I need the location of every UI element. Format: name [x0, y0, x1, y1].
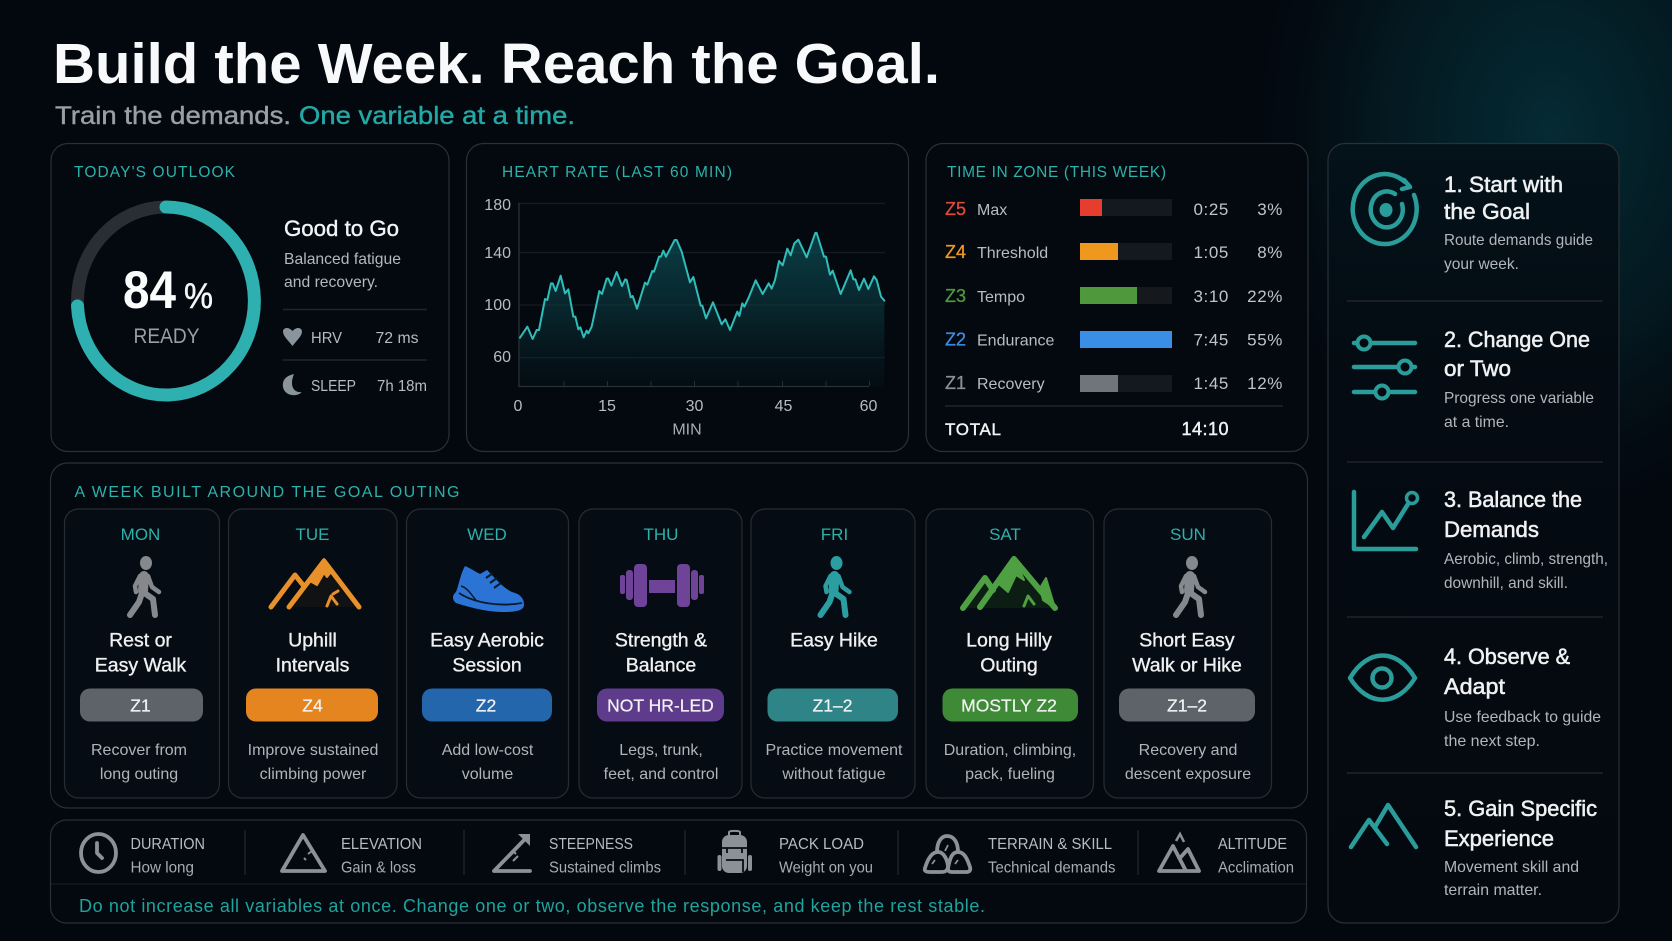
- icon: dumbbell: [620, 564, 704, 607]
- day card: Saturday: MOSTLY Z2: [961, 696, 1057, 716]
- line chart: heart rate: 15: [598, 398, 616, 415]
- readiness ring: %: [184, 277, 213, 316]
- metric: sleep: SLEEP: [311, 378, 356, 395]
- icon: altitude peaks: [1159, 834, 1199, 871]
- line chart: heart rate: 180: [484, 197, 511, 214]
- icon: orange mountain: [271, 559, 359, 607]
- icon: steep slope: [494, 834, 530, 871]
- day card: Monday: Rest or: [109, 630, 172, 652]
- zone row: Z5: Max: [977, 202, 1007, 219]
- principle 1: Route demands guide: [1444, 232, 1593, 249]
- day card: Sunday: [1104, 509, 1272, 798]
- day card: Tuesday: climbing power: [260, 766, 367, 783]
- status text: Good to Go: [284, 216, 399, 241]
- principle 5: 5. Gain Specific: [1444, 796, 1597, 821]
- day card: Tuesday: TUE: [296, 525, 330, 544]
- day card: Saturday: SAT: [989, 525, 1021, 544]
- variable: elevation: [282, 835, 422, 876]
- zone row: Z4: 1:05: [1194, 243, 1229, 262]
- day card: Sunday: Recovery and: [1139, 742, 1237, 759]
- day card: Tuesday: Uphill: [288, 630, 337, 652]
- zone row: Z3: [945, 286, 1283, 306]
- panel: today's outlook: [51, 144, 449, 452]
- day card: Thursday: Legs, trunk,: [619, 742, 703, 759]
- day card: Friday: Easy Hike: [790, 630, 878, 652]
- day card: Wednesday: [406, 509, 568, 798]
- variable: duration: DURATION: [130, 836, 205, 853]
- line chart: heart rate: 45: [775, 398, 792, 415]
- variable: elevation: ELEVATION: [341, 836, 422, 853]
- line chart: heart rate: 30: [686, 398, 704, 415]
- zone row: Z5: 0:25: [1194, 200, 1229, 219]
- zone row: Z5: [945, 199, 1283, 219]
- day card: Thursday: Balance: [626, 654, 696, 676]
- principle 3: [1354, 487, 1608, 592]
- zone row: Z4: Z4: [945, 242, 966, 262]
- day card: Friday: Practice movement: [766, 742, 903, 759]
- variable: steepness: [494, 834, 661, 876]
- zone row: Z2: Z2: [945, 330, 966, 350]
- day card: Thursday: NOT HR-LED: [607, 696, 714, 716]
- subtitle: Train the demands.: [55, 102, 291, 130]
- icon: shoe: [453, 566, 524, 612]
- day card: Saturday: pack, fueling: [965, 766, 1055, 783]
- zone row: Z1: 1:45: [1194, 374, 1229, 393]
- zone total: 14:10: [1181, 419, 1229, 439]
- zone row: Z1: [945, 373, 1283, 393]
- zone row: Z3: Tempo: [977, 289, 1025, 306]
- day card: Sunday: SUN: [1170, 525, 1206, 544]
- icon: walker: [130, 556, 159, 615]
- variable: steepness: Sustained climbs: [549, 860, 661, 876]
- day card: Monday: long outing: [100, 766, 178, 783]
- day card: Wednesday: WED: [467, 525, 507, 544]
- principle 1: your week.: [1444, 256, 1519, 273]
- metric: sleep: 7h 18m: [377, 378, 427, 395]
- icon: backpack: [718, 831, 752, 873]
- variable: duration: [81, 834, 205, 876]
- panel: week plan: [50, 463, 1308, 808]
- icon: green mountain: [963, 557, 1055, 608]
- day card: Wednesday: Easy Aerobic: [430, 630, 544, 652]
- zone row: Z3: Z3: [945, 286, 966, 306]
- icon: elevation peak: [282, 835, 325, 871]
- metric: HRV: HRV: [311, 330, 342, 347]
- principle 2: Progress one variable: [1444, 390, 1594, 407]
- principle 2: at a time.: [1444, 414, 1509, 431]
- day card: Tuesday: Z4: [302, 696, 323, 716]
- line chart: heart rate: 100: [484, 297, 511, 314]
- variable: elevation: Gain & loss: [341, 860, 416, 876]
- principle 4: Adapt: [1444, 674, 1506, 699]
- day card: Friday: [751, 509, 915, 798]
- icon: target: [1353, 174, 1417, 244]
- line chart: heart rate: 0: [514, 398, 523, 415]
- zone row: Z1: 12%: [1247, 374, 1283, 393]
- line chart: heart rate: MIN: [672, 422, 702, 438]
- day card: Monday: Z1: [130, 696, 151, 716]
- zone row: Z5: 3%: [1257, 200, 1283, 219]
- callout: guidance note: Do not increase all variables at once. Change one or two, observe the response, and keep the rest stable.: [79, 896, 985, 916]
- principle 1: [1353, 172, 1593, 273]
- variable: pack load: PACK LOAD: [779, 836, 864, 853]
- zone row: Z4: Threshold: [977, 245, 1048, 262]
- principle 5: Experience: [1444, 826, 1554, 851]
- subtitle: One variable at a time.: [299, 102, 575, 130]
- icon: hiker: [820, 556, 850, 615]
- icon: eye: [1350, 656, 1415, 700]
- day card: Wednesday: Session: [452, 654, 522, 676]
- variable: terrain and skill: TERRAIN & SKILL: [988, 836, 1112, 853]
- day card: Friday: without fatigue: [781, 766, 886, 783]
- variable: pack load: [718, 831, 873, 876]
- day card: Wednesday: volume: [462, 766, 513, 783]
- zone row: Z2: [945, 330, 1283, 350]
- subtitle: [55, 102, 575, 130]
- metric: sleep: [283, 374, 427, 395]
- zone row: Z3: 22%: [1247, 287, 1283, 306]
- variable: altitude: Acclimation: [1218, 860, 1294, 876]
- day card: Tuesday: Improve sustained: [248, 742, 378, 759]
- day card: Saturday: Duration, climbing,: [944, 742, 1076, 759]
- principle 4: the next step.: [1444, 733, 1540, 750]
- panel: principles: [1328, 144, 1619, 923]
- line chart: heart rate: 140: [484, 245, 511, 262]
- icon: clock: [81, 834, 116, 872]
- principle 4: Use feedback to guide: [1444, 709, 1601, 726]
- day card: Monday: [64, 509, 220, 798]
- principle 3: Aerobic, climb, strength,: [1444, 551, 1608, 568]
- day card: Thursday: feet, and control: [604, 766, 718, 783]
- variable: terrain and skill: Technical demands: [988, 860, 1116, 876]
- zone row: Z1: Z1: [945, 373, 966, 393]
- principle 2: [1354, 327, 1594, 431]
- day card: Sunday: descent exposure: [1125, 766, 1251, 783]
- heading: heart rate: HEART RATE (LAST 60 MIN): [502, 164, 732, 181]
- line chart: heart rate: 60: [493, 349, 511, 366]
- zone row: Z2: 55%: [1247, 330, 1283, 350]
- day card: Monday: Easy Walk: [95, 654, 186, 676]
- day card: Thursday: [579, 509, 742, 798]
- zone row: Z2: Endurance: [977, 332, 1054, 350]
- principle 5: terrain matter.: [1444, 882, 1542, 899]
- day card: Saturday: Outing: [980, 654, 1038, 676]
- status text: Balanced fatigue: [284, 251, 401, 268]
- panel: heart rate: [466, 144, 908, 452]
- panel: time in zone: [926, 144, 1308, 452]
- heading: today's outlook: TODAY'S OUTLOOK: [74, 164, 236, 181]
- day card: Tuesday: [228, 509, 397, 798]
- principle 1: 1. Start with: [1444, 172, 1563, 197]
- icon: chart: [1354, 492, 1418, 549]
- day card: Sunday: Walk or Hike: [1132, 654, 1242, 676]
- icon: mountains: [1351, 805, 1416, 847]
- principle 5: [1351, 796, 1597, 899]
- variable: pack load: Weight on you: [779, 860, 873, 876]
- principle 4: 4. Observe &: [1444, 644, 1570, 669]
- day card: Sunday: Short Easy: [1139, 630, 1235, 652]
- status text: [284, 216, 401, 291]
- day card: Sunday: Z1–2: [1167, 696, 1207, 716]
- metric: HRV: 72 ms: [376, 330, 418, 347]
- principle 3: 3. Balance the: [1444, 487, 1582, 512]
- title: Build the Week. Reach the Goal.: [53, 32, 940, 96]
- zone row: Z4: [945, 242, 1283, 262]
- readiness ring: READY: [134, 325, 200, 348]
- day card: Saturday: [926, 509, 1094, 798]
- line chart: heart rate: 60: [860, 398, 878, 415]
- heading: time in zone: TIME IN ZONE (THIS WEEK): [947, 164, 1166, 181]
- principle 2: 2. Change One: [1444, 327, 1590, 352]
- zone row: Z5: Z5: [945, 199, 966, 219]
- readiness ring: 84: [123, 261, 176, 320]
- day card: Thursday: Strength &: [615, 630, 707, 652]
- zone row: Z2: 7:45: [1194, 330, 1229, 350]
- variable: altitude: [1159, 834, 1294, 876]
- zone row: Z1: Recovery: [977, 376, 1045, 393]
- day card: Monday: Recover from: [91, 742, 187, 759]
- day card: Thursday: THU: [644, 525, 678, 544]
- zone total: [945, 419, 1229, 439]
- metric: HRV: [283, 328, 418, 347]
- variable: steepness: STEEPNESS: [549, 836, 633, 853]
- day card: Wednesday: Z2: [476, 696, 496, 716]
- panel: training variables: [50, 820, 1306, 923]
- variable: altitude: ALTITUDE: [1218, 836, 1287, 853]
- icon: walker: [1176, 556, 1205, 615]
- icon: sliders: [1354, 336, 1415, 398]
- day card: Friday: Z1–2: [813, 696, 852, 716]
- variable: duration: How long: [130, 860, 194, 876]
- principle 3: downhill, and skill.: [1444, 575, 1568, 592]
- heading: week plan: A WEEK BUILT AROUND THE GOAL OUTING: [74, 484, 460, 501]
- day card: Monday: MON: [121, 525, 160, 544]
- day card: Friday: FRI: [821, 525, 848, 544]
- principle 2: or Two: [1444, 356, 1511, 381]
- principle 4: [1350, 644, 1601, 750]
- readiness ring: [78, 207, 254, 395]
- day card: Saturday: Long Hilly: [966, 630, 1052, 652]
- zone total: TOTAL: [945, 420, 1001, 439]
- day card: Wednesday: Add low-cost: [442, 742, 534, 759]
- principle 1: the Goal: [1444, 199, 1530, 224]
- day card: Tuesday: Intervals: [276, 654, 350, 676]
- variable: terrain and skill: [925, 836, 1116, 876]
- principle 3: Demands: [1444, 517, 1539, 542]
- line chart: heart rate: [484, 197, 885, 438]
- zone row: Z3: 3:10: [1194, 287, 1229, 306]
- principle 5: Movement skill and: [1444, 859, 1579, 876]
- icon: rocks: [925, 836, 970, 872]
- status text: and recovery.: [284, 274, 378, 291]
- zone row: Z4: 8%: [1257, 243, 1283, 262]
